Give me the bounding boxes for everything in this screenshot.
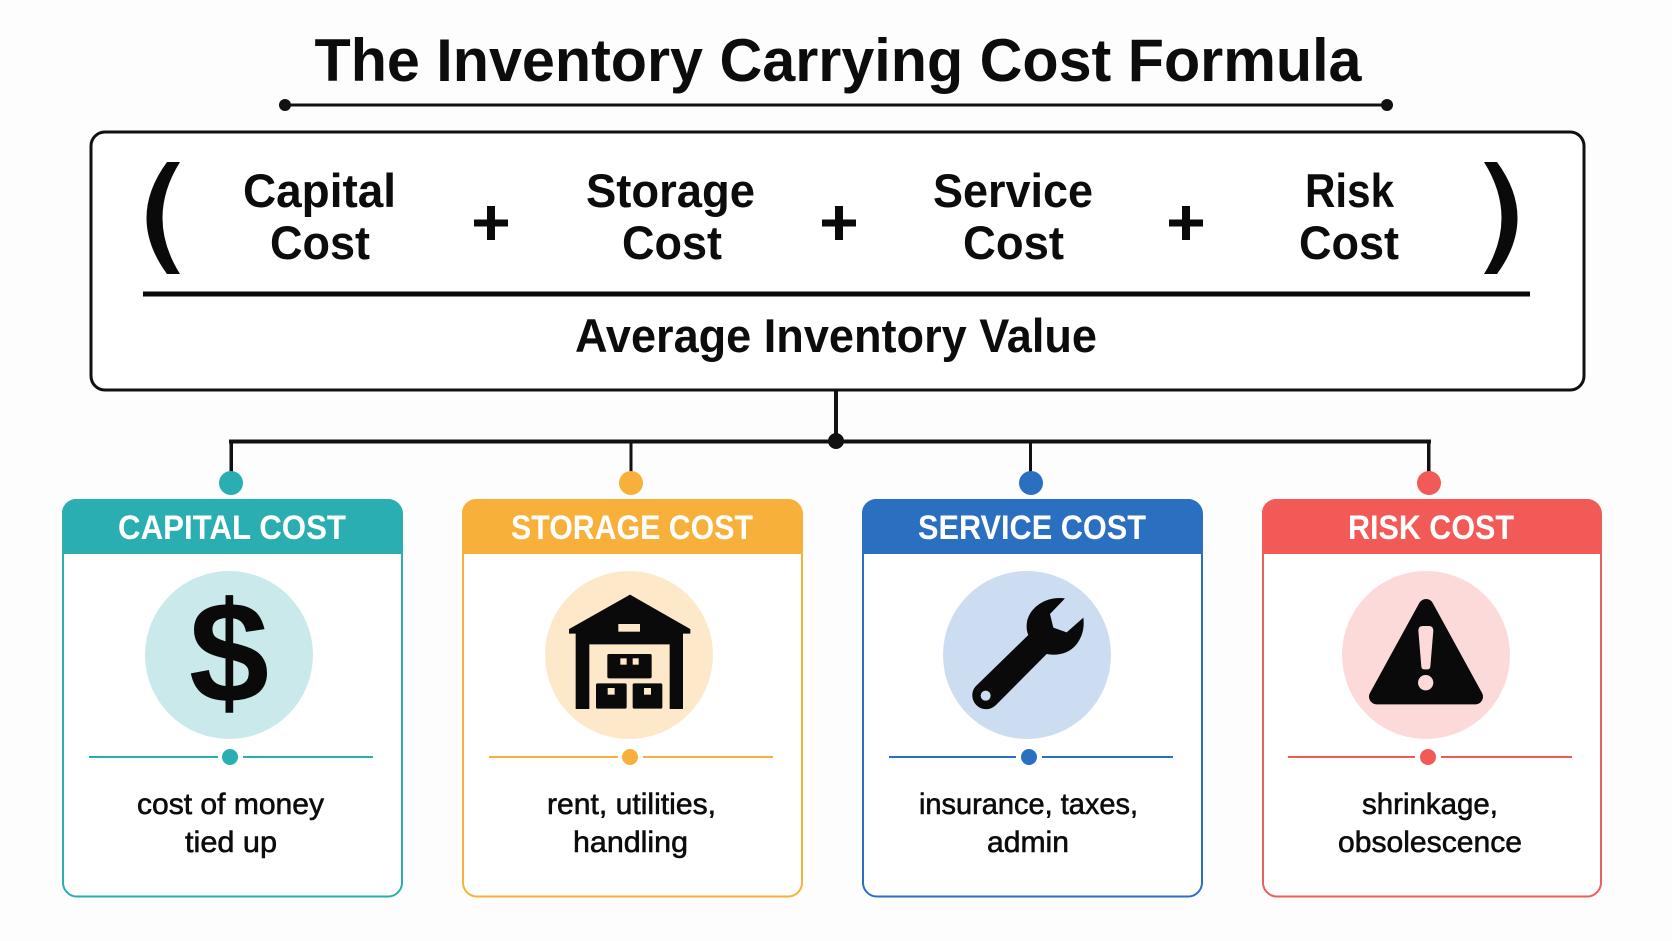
header: risk cost [1262, 499, 1601, 554]
connector tree [229, 390, 1431, 475]
description: insurance, taxes, [919, 788, 1138, 821]
divider [89, 749, 373, 765]
header: capital cost: CAPITAL COST [118, 509, 346, 547]
term: capital cost [243, 164, 396, 269]
icon: warning triangle [1342, 571, 1510, 739]
denominator: Average Inventory Value [575, 309, 1097, 362]
header: risk cost: RISK COST [1348, 509, 1514, 547]
panel: formula [91, 132, 1584, 390]
icon: warehouse [545, 571, 713, 739]
description: tied up [185, 826, 277, 859]
term: risk cost: Risk [1305, 164, 1395, 217]
description: handling [573, 826, 688, 859]
connector dot: risk [1417, 471, 1441, 495]
icon: wrench [943, 571, 1111, 739]
panel: storage cost [462, 499, 802, 896]
left parenthesis [146, 162, 180, 274]
header: storage cost: STORAGE COST [511, 509, 753, 547]
connector dot: service [1019, 471, 1043, 495]
plus sign 3 [1169, 206, 1203, 240]
panel: capital cost [62, 499, 402, 896]
description: shrinkage, [1362, 788, 1498, 821]
description [919, 788, 1138, 859]
header: storage cost [462, 499, 802, 554]
fraction bar [143, 292, 1530, 296]
term: storage cost: Cost [622, 216, 722, 269]
title underline [279, 99, 1393, 111]
icon: dollar sign [145, 571, 313, 739]
term: service cost: Cost [963, 216, 1064, 269]
right parenthesis [1484, 162, 1518, 274]
header: service cost: SERVICE COST [918, 509, 1146, 547]
term: risk cost: Cost [1299, 216, 1399, 269]
term: storage cost: Storage [586, 164, 755, 217]
description: admin [987, 826, 1069, 859]
term: risk cost [1299, 164, 1399, 269]
title: The Inventory Carrying Cost Formula [314, 27, 1362, 94]
header: service cost [862, 499, 1202, 554]
divider [489, 749, 773, 765]
description: cost of money [137, 788, 324, 821]
divider [889, 749, 1173, 765]
term: capital cost: Cost [270, 216, 370, 269]
description: obsolescence [1338, 826, 1522, 859]
term: service cost [933, 164, 1093, 269]
description [137, 788, 324, 859]
icon: dollar sign: $ [189, 572, 269, 733]
divider [1288, 749, 1572, 765]
plus sign 2 [822, 206, 856, 240]
header: capital cost [62, 499, 402, 554]
panel: service cost [862, 499, 1202, 896]
description [547, 788, 716, 859]
connector dot: storage [619, 471, 643, 495]
description: rent, utilities, [547, 788, 716, 821]
connector dot: capital [219, 471, 243, 495]
term: service cost: Service [933, 164, 1093, 217]
term: storage cost [586, 164, 755, 269]
description [1338, 788, 1522, 859]
plus sign 1 [474, 206, 508, 240]
term: capital cost: Capital [243, 164, 396, 217]
panel: risk cost [1262, 499, 1601, 896]
